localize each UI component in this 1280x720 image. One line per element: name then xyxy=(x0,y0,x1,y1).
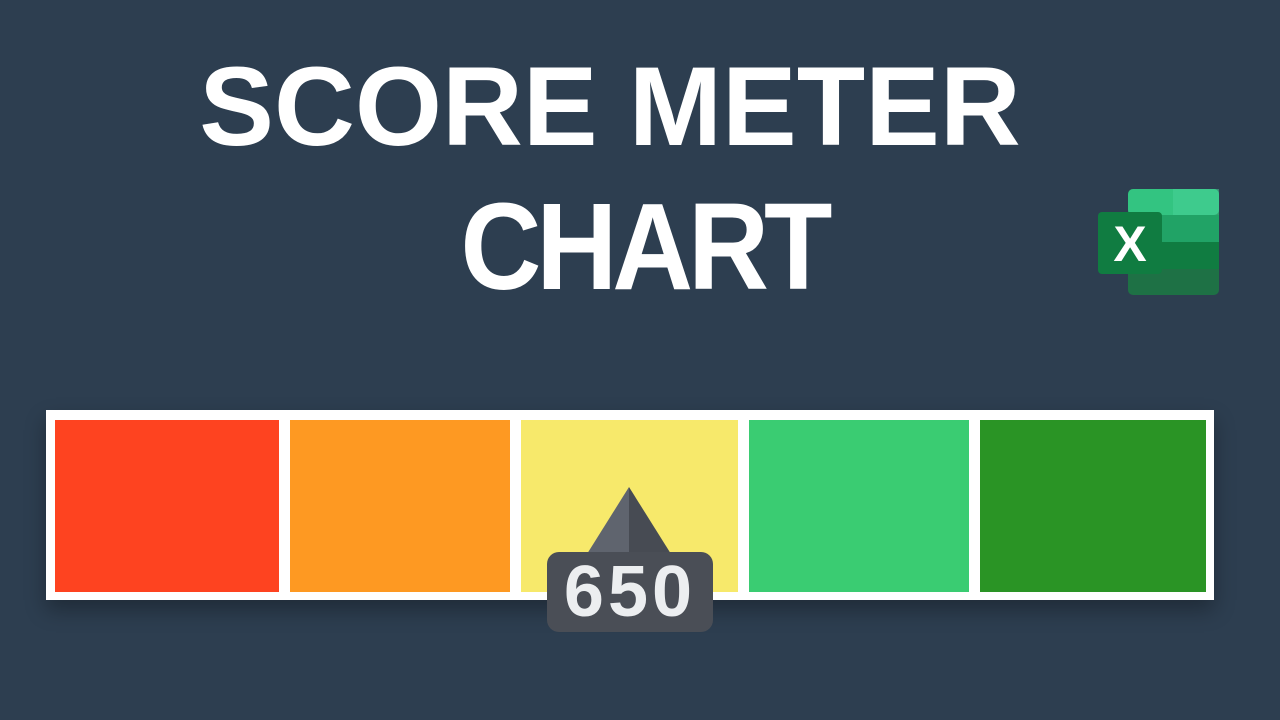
value label: 650 xyxy=(564,552,696,632)
icon: excel logo xyxy=(1098,189,1219,295)
segment: yellow xyxy=(521,420,738,592)
title line 1: SCORE METER xyxy=(199,44,1021,169)
segment: dark green xyxy=(980,420,1206,592)
segment: orange xyxy=(290,420,510,592)
meter bar xyxy=(46,410,1214,600)
title xyxy=(199,44,1021,315)
icon: excel logo: X xyxy=(1113,216,1147,272)
segment: red xyxy=(55,420,279,592)
segment: light green xyxy=(749,420,969,592)
pointer xyxy=(547,487,713,632)
pointer triangle xyxy=(588,487,670,552)
title line 2: CHART xyxy=(461,178,827,315)
